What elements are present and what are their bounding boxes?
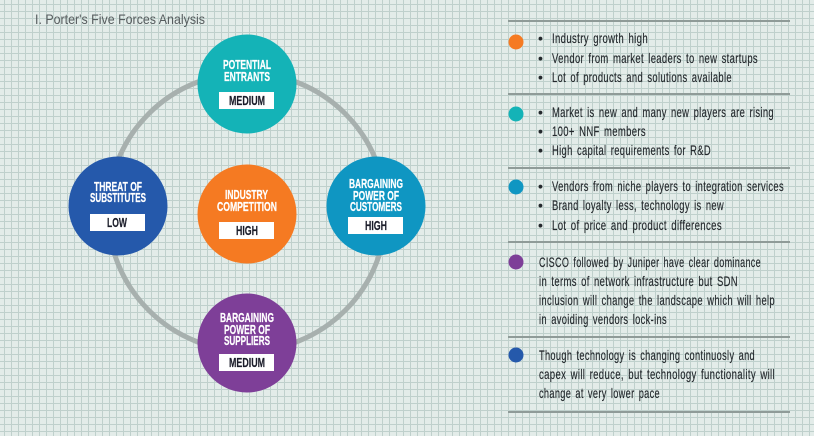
panel: potential entrants notes: • <box>538 104 543 120</box>
force: bargaining power of suppliers: SUPPLIERS <box>224 333 270 348</box>
panel: potential entrants notes: • <box>538 123 543 139</box>
force: bargaining power of customers: POWER OF <box>353 188 399 203</box>
panel: customers notes: Lot of price and product differences <box>552 217 722 233</box>
section divider rules <box>508 21 790 412</box>
force: bargaining power of customers: CUSTOMERS <box>350 199 402 214</box>
panel: substitutes notes: change at very lower pace <box>539 385 660 401</box>
force: industry competition: COMPETITION <box>217 199 277 214</box>
panel: potential entrants notes: High capital requirements for R&D <box>552 142 711 158</box>
force: threat of substitutes: LOW <box>107 215 127 230</box>
force: bargaining power of suppliers: MEDIUM <box>229 355 265 370</box>
force: bargaining power of suppliers: POWER OF <box>224 322 270 337</box>
force: bargaining power of suppliers: BARGAINING <box>220 310 274 325</box>
force: potential entrants: POTENTIAL <box>223 57 271 72</box>
panel: customers notes: • <box>538 197 543 213</box>
title: I. Porter's Five Forces Analysis <box>35 11 205 27</box>
panel: industry competition notes: Industry growth high <box>552 30 648 46</box>
panel: suppliers notes <box>508 254 775 327</box>
panel: industry competition notes: • <box>538 30 543 46</box>
force: threat of substitutes <box>68 156 168 256</box>
panel: customers notes: • <box>538 217 543 233</box>
panel: potential entrants notes: 100+ NNF members <box>552 123 646 139</box>
force: potential entrants: MEDIUM <box>229 93 265 108</box>
force: bargaining power of suppliers <box>198 294 296 392</box>
panel: customers notes <box>508 178 784 233</box>
force: bargaining power of customers: BARGAINING <box>349 176 403 191</box>
panel: customers notes: Brand loyalty less, technology is new <box>552 197 724 213</box>
force: industry competition: HIGH <box>236 223 258 238</box>
force: industry competition <box>198 164 296 264</box>
panel: potential entrants notes: • <box>538 142 543 158</box>
panel: industry competition notes: • <box>538 50 543 66</box>
panel: industry competition notes: • <box>538 69 543 85</box>
panel: industry competition notes: Lot of products and solutions available <box>552 69 732 85</box>
panel: industry competition notes <box>508 30 758 85</box>
panel: potential entrants notes <box>508 104 774 158</box>
panel: substitutes notes <box>508 347 775 401</box>
force: threat of substitutes: SUBSTITUTES <box>90 190 146 205</box>
force: threat of substitutes: THREAT OF <box>94 179 142 194</box>
force: potential entrants <box>198 34 296 134</box>
force: bargaining power of customers: HIGH <box>365 218 387 233</box>
panel: customers notes: • <box>538 178 543 194</box>
force: potential entrants: ENTRANTS <box>224 69 270 84</box>
force: industry competition: INDUSTRY <box>225 187 268 202</box>
panel: suppliers notes: in avoiding vendors lock-ins <box>539 311 667 327</box>
force: bargaining power of customers <box>326 156 426 256</box>
diagram ring <box>108 73 386 351</box>
